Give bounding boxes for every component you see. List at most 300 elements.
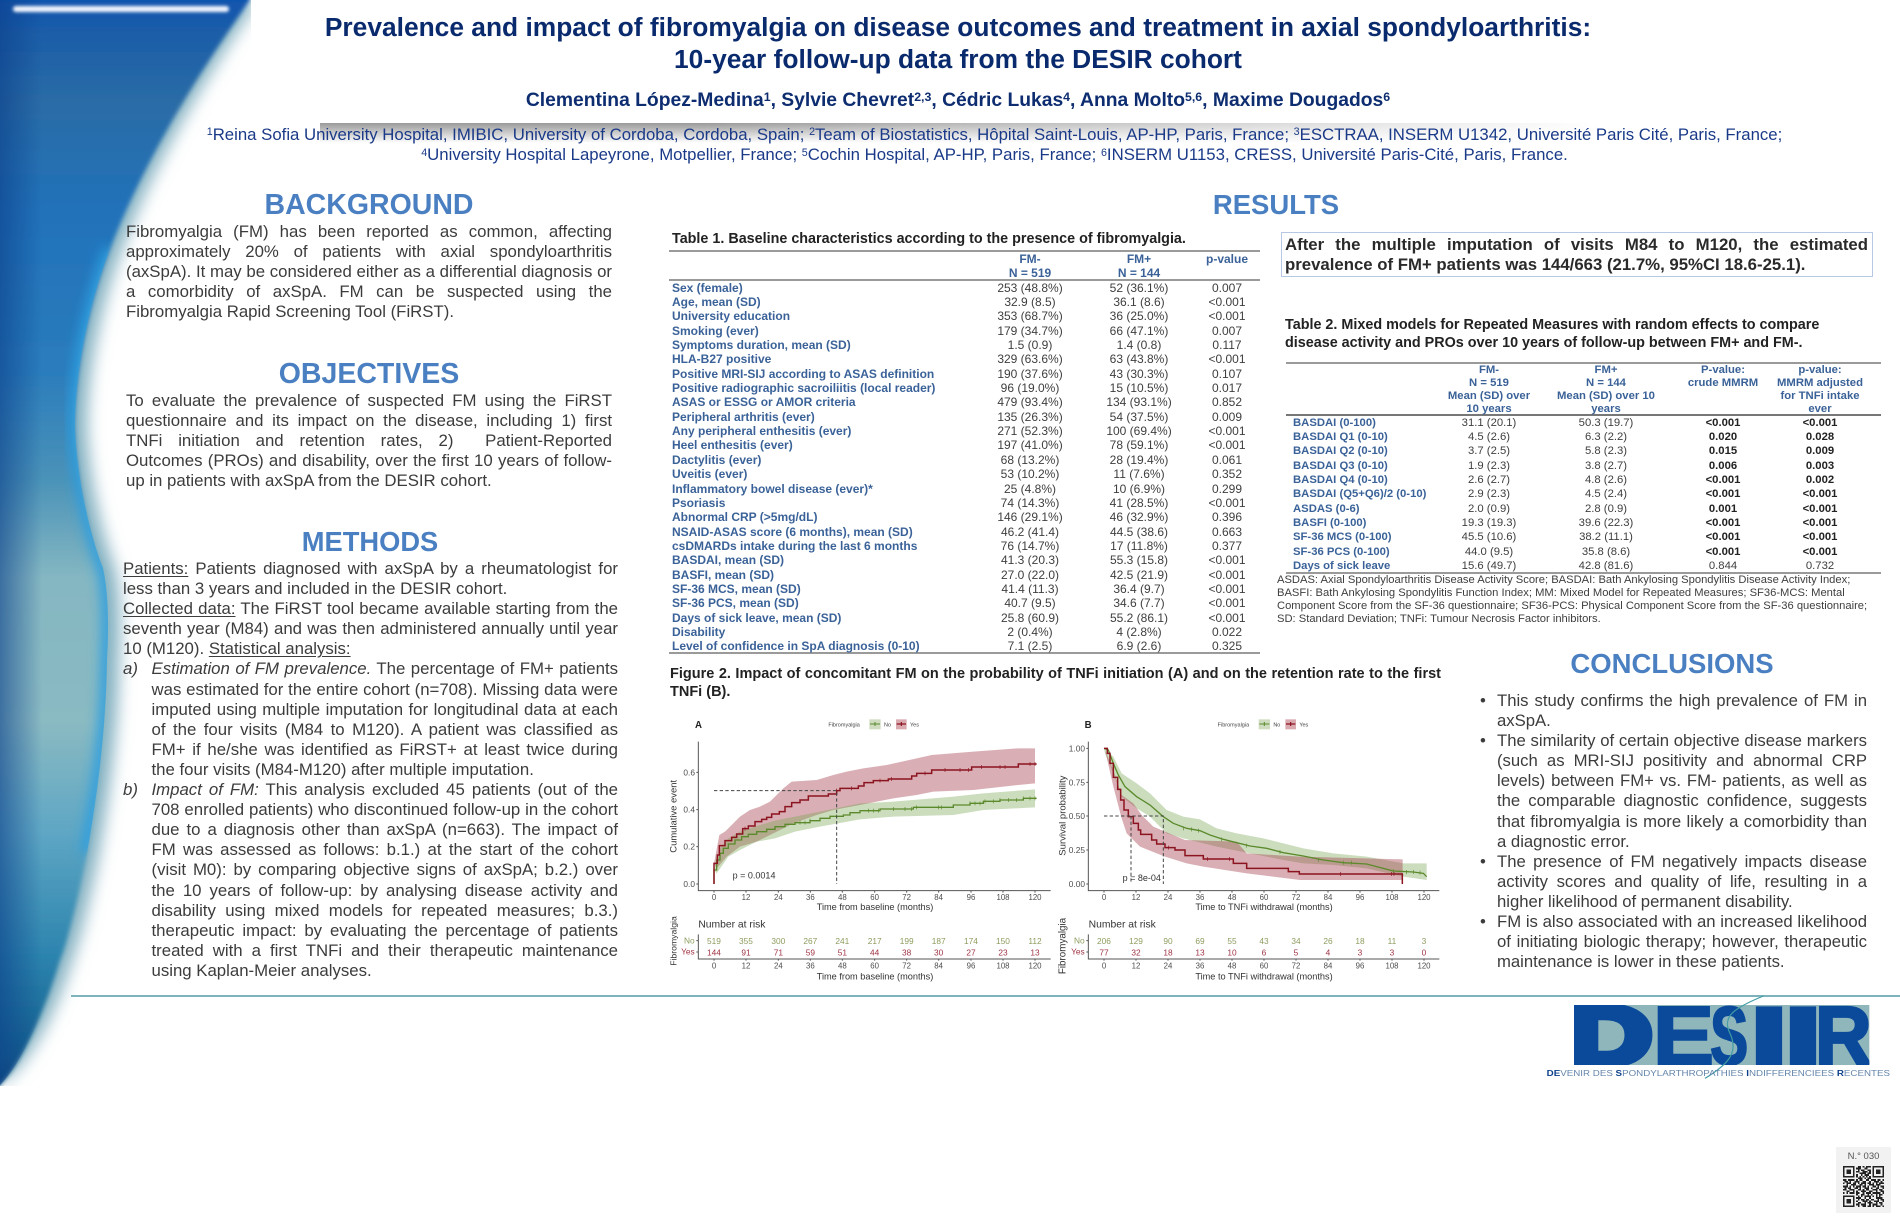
logo: DESIR: E <box>1653 990 1714 1082</box>
risk table: 55 <box>1227 936 1237 946</box>
logo: DESIR: S <box>1710 990 1748 1082</box>
y ticks <box>1069 743 1085 889</box>
table 1: 134 (93.1%) <box>1106 395 1172 409</box>
risk table: Yes <box>681 947 695 957</box>
risk table: 48 <box>1228 961 1237 970</box>
table 1: 0.299 <box>1212 482 1242 496</box>
table 1: 353 (68.7%) <box>997 309 1063 323</box>
x ticks: 72 <box>902 893 911 902</box>
table 1: 0.017 <box>1212 381 1242 395</box>
table 2: 0.009 <box>1806 445 1834 457</box>
risk table: 77 <box>1099 947 1109 957</box>
legend: No <box>884 722 891 728</box>
callout: prevalence: prevalence of FM+ patients was 144/663 (21.7%, 95%CI 18.6-25.1). <box>1285 255 1805 274</box>
table 1: 36 (25.0%) <box>1110 309 1168 323</box>
table 2: BASDAI (0-100) <box>1293 416 1376 428</box>
x ticks: 84 <box>934 893 944 902</box>
table 1: 0.007 <box>1212 324 1242 338</box>
risk table: 300 <box>771 936 786 946</box>
table 1: Sex (female) <box>672 280 743 294</box>
risk table: 44 <box>870 947 880 957</box>
heading: results: RESULTS <box>1213 188 1339 220</box>
table 1: HLA-B27 positive <box>672 352 771 366</box>
text: conclusions: activity scores and quality of life, resulting in a <box>1497 872 1867 891</box>
y label: Survival probability <box>1057 775 1068 856</box>
table 1: SF-36 MCS, mean (SD) <box>672 582 801 596</box>
table 2: FM+ <box>1595 364 1617 376</box>
table 1: 76 (14.7%) <box>1001 539 1059 553</box>
figure 2 title <box>670 666 1441 700</box>
list item b: b) <box>123 780 138 799</box>
list item b: Impact of FM: This analysis excluded 45 patients (out of the <box>152 780 618 799</box>
list item b: disability using mixed models for repeated measures; b.3.) <box>152 901 618 920</box>
grey band behind affiliations <box>320 123 1528 142</box>
text: conclusions: The similarity of certain objective disease markers <box>1497 731 1867 750</box>
table 1: 0.852 <box>1212 395 1242 409</box>
risk table: 13 <box>1030 947 1040 957</box>
risk table: 48 <box>838 961 847 970</box>
heading: conclusions: CONCLUSIONS <box>1570 648 1774 678</box>
text: background <box>126 222 612 321</box>
text: conclusions: higher likelihood of permanent disability. <box>1497 892 1793 911</box>
table 2: 4.5 (2.4) <box>1585 488 1627 500</box>
table 1: Heel enthesitis (ever) <box>672 438 793 452</box>
table 2: BASDAI Q1 (0-10) <box>1293 431 1388 443</box>
text: conclusions: This study confirms the high prevalence of FM in <box>1497 691 1867 710</box>
median lines <box>1104 816 1163 884</box>
table 1: 96 (19.0%) <box>1001 381 1059 395</box>
table 1: 7.1 (2.5) <box>1008 639 1052 653</box>
risk table: 90 <box>1163 936 1173 946</box>
list item a: a) <box>123 659 138 678</box>
text: objectives: up in patients with axSpA from the DESIR cohort. <box>126 471 492 490</box>
risk table: 36 <box>806 961 815 970</box>
x ticks: 24 <box>1164 893 1173 902</box>
table 1: 28 (19.4%) <box>1110 453 1168 467</box>
table 2: 44.0 (9.5) <box>1465 546 1513 558</box>
legend: Fibromyalgia <box>828 722 861 728</box>
table 1: SF-36 PCS, mean (SD) <box>672 596 799 610</box>
table 2: years <box>1591 403 1621 415</box>
curve: Yes <box>1104 748 1402 884</box>
table 1: <0.001 <box>1208 553 1246 567</box>
table 1: <0.001 <box>1208 568 1246 582</box>
list item b <box>123 780 618 980</box>
table 1: 253 (48.8%) <box>997 280 1063 294</box>
table 1: 32.9 (8.5) <box>1004 295 1056 309</box>
table 1: N = 144 <box>1118 266 1160 280</box>
risk table: 59 <box>806 947 815 957</box>
table 1: 27.0 (22.0) <box>1001 568 1059 582</box>
x ticks: 0 <box>712 893 717 902</box>
table 1: 271 (52.3%) <box>997 424 1063 438</box>
risk table: 241 <box>835 936 850 946</box>
risk table: 71 <box>774 947 783 957</box>
table 2: <0.001 <box>1706 488 1740 500</box>
risk table: 13 <box>1195 947 1205 957</box>
text: • <box>1480 912 1486 931</box>
list item a: imputed using multiple imputation for longitudinal data at each <box>152 700 618 719</box>
risk table: 0 <box>1422 947 1427 957</box>
table 2: SF-36 MCS (0-100) <box>1293 531 1392 543</box>
table 1: <0.001 <box>1208 309 1246 323</box>
table 2: 0.844 <box>1709 560 1737 572</box>
table 2: 0.001 <box>1709 503 1737 515</box>
legend <box>828 719 919 729</box>
list item b: FM was assessed as follows: b.1.) at the start of the cohort <box>152 840 618 859</box>
table 2: <0.001 <box>1803 531 1837 543</box>
p value: p = 8e-04 <box>1123 873 1161 883</box>
x ticks: 0 <box>1102 893 1107 902</box>
risk table: Time to TNFi withdrawal (months) <box>1195 971 1333 981</box>
text: conclusions: maintenance is lower in these patients. <box>1497 952 1785 971</box>
risk table: No <box>1074 935 1085 945</box>
risk table: 11 <box>1388 936 1397 946</box>
table 2: 35.8 (8.6) <box>1582 546 1630 558</box>
table 2: 45.5 (10.6) <box>1462 531 1516 543</box>
text: background: (axSpA). It may be considered either as a differential diagnosis or <box>126 262 612 281</box>
table 2: ever <box>1808 403 1832 415</box>
risk table: 43 <box>1259 936 1269 946</box>
risk table: 96 <box>1356 961 1365 970</box>
list item b: 708 enrolled patients) who discontinued follow-up in the cohort <box>152 800 618 819</box>
table 2: p-value: <box>1798 364 1842 376</box>
confidence bands <box>714 748 1035 873</box>
x ticks: 72 <box>1292 893 1300 902</box>
table 1: 52 (36.1%) <box>1110 280 1168 294</box>
logo: DESIR: R <box>1815 990 1872 1082</box>
panel letter B: B <box>1085 720 1092 731</box>
table 1: 34.6 (7.7) <box>1113 596 1165 610</box>
logo: DESIR: I <box>1747 990 1791 1082</box>
risk table: Yes <box>1071 947 1085 957</box>
text: methods: Patients: Patients diagnosed with axSpA by a rheumatologist for <box>123 559 618 578</box>
list item b: (visit M0): by comparing objective signs of axSpA; b.2.) over <box>152 860 618 879</box>
y ticks: 0.75 <box>1069 777 1085 787</box>
table 1: 15 (10.5%) <box>1110 381 1168 395</box>
panel letter A: A <box>695 720 702 731</box>
risk table: 3 <box>1358 947 1363 957</box>
text: objectives <box>126 391 612 490</box>
affiliations: 4University Hospital Lapeyrone, Motpellier, France; 5Cochin Hospital, AP-HP, Paris, France; 6INSERM U1153, CRESS, Université Paris-Cité, Paris, France. <box>421 145 1568 164</box>
table 2: 0.028 <box>1806 431 1834 443</box>
table 1: 11 (7.6%) <box>1113 467 1165 481</box>
table 1: <0.001 <box>1208 611 1246 625</box>
table 2: <0.001 <box>1706 517 1740 529</box>
table 1: FM+ <box>1127 252 1151 266</box>
heading: background: BACKGROUND <box>264 188 474 220</box>
x ticks: 36 <box>1196 893 1205 902</box>
text: methods: Collected data: The FiRST tool became available starting from the <box>123 599 618 618</box>
risk table: 112 <box>1028 936 1042 946</box>
table 1: 54 (37.5%) <box>1110 410 1168 424</box>
table 2: P-value: <box>1701 364 1745 376</box>
legend <box>1218 719 1309 729</box>
chart B: survival probability <box>1057 719 1440 982</box>
table 2: 10 years <box>1466 403 1512 415</box>
table 2: 5.8 (2.3) <box>1585 445 1627 457</box>
risk table <box>1057 917 1439 981</box>
text: conclusions: a diagnostic error. <box>1497 832 1630 851</box>
risk table: 6 <box>1262 947 1267 957</box>
table 1: 479 (93.4%) <box>997 395 1063 409</box>
legend: Yes <box>1299 722 1309 728</box>
y ticks: 0.25 <box>1069 845 1085 855</box>
x ticks: 36 <box>806 893 815 902</box>
x ticks: 48 <box>838 893 847 902</box>
table 1: 78 (59.1%) <box>1110 438 1168 452</box>
table 1: 41.3 (20.3) <box>1001 553 1059 567</box>
curve: No <box>1104 748 1427 877</box>
x ticks: 120 <box>1028 893 1042 902</box>
x label: Time to TNFi withdrawal (months) <box>1195 902 1333 912</box>
x ticks: 60 <box>1260 893 1269 902</box>
affiliations: 1Reina Sofia University Hospital, IMIBIC, University of Cordoba, Cordoba, Spain; 2Team of Biostatistics, Hôpital Saint-Louis, AP-HP, Paris, France; 3ESCTRAA, INSERM U1342, Université Paris Cité, Paris, France; <box>207 124 1782 144</box>
table 1: 40.7 (9.5) <box>1004 596 1056 610</box>
y label: Cumulative event <box>668 780 679 853</box>
risk table: 38 <box>902 947 912 957</box>
table 1: 66 (47.1%) <box>1110 324 1168 338</box>
curve: Yes <box>714 762 1037 884</box>
table 2: MMRM adjusted <box>1777 377 1863 389</box>
risk table: 10 <box>1227 947 1237 957</box>
risk table: 72 <box>1292 961 1300 970</box>
risk table: 120 <box>1028 961 1042 970</box>
table 1: 25 (4.8%) <box>1004 482 1056 496</box>
table 2: 0.015 <box>1709 445 1737 457</box>
QR badge: N.° 030 <box>1848 1151 1879 1162</box>
table 2: BASDAI Q2 (0-10) <box>1293 445 1388 457</box>
risk table: 32 <box>1131 947 1141 957</box>
text: conclusions: (such as MRI-SIJ positivity and abnormal CRP <box>1497 751 1867 770</box>
table 1: 55.3 (15.8) <box>1110 553 1168 567</box>
risk table: 18 <box>1355 936 1365 946</box>
text: objectives: To evaluate the prevalence of suspected FM using the FiRST <box>126 391 612 410</box>
table 2 footnote: SD: Standard Deviation; TNFi: Tumour Necrosis Factor inhibitors. <box>1277 612 1601 624</box>
table 2: 42.8 (81.6) <box>1579 560 1633 572</box>
table 1: 6.9 (2.6) <box>1117 639 1161 653</box>
table 2: 6.3 (2.2) <box>1585 431 1627 443</box>
risk table: 26 <box>1323 936 1333 946</box>
table 1: 190 (37.6%) <box>997 367 1063 381</box>
table 1: Age, mean (SD) <box>672 295 761 309</box>
table 1: 36.1 (8.6) <box>1113 295 1165 309</box>
risk table: 60 <box>1260 961 1269 970</box>
table 1: 36.4 (9.7) <box>1113 582 1165 596</box>
table 1: 0.352 <box>1212 467 1242 481</box>
table 1: 0.007 <box>1212 280 1242 294</box>
chart A: cumulative event <box>668 719 1051 982</box>
table 2: <0.001 <box>1706 474 1740 486</box>
text: conclusions: the comparable diagnostic confidence, suggests <box>1497 791 1867 810</box>
callout: prevalence: After the multiple imputation of visits M84 to M120, the estimated <box>1285 235 1868 254</box>
table 1: 53 (10.2%) <box>1001 467 1059 481</box>
table 1: <0.001 <box>1208 424 1246 438</box>
table 1: <0.001 <box>1208 596 1246 610</box>
table 1: BASFI, mean (SD) <box>672 568 774 582</box>
risk table: 36 <box>1196 961 1205 970</box>
x ticks: 12 <box>1132 893 1140 902</box>
risk table: 144 <box>707 947 721 957</box>
x ticks: 120 <box>1417 893 1431 902</box>
table 1: csDMARDs intake during the last 6 months <box>672 539 917 553</box>
table 1: 0.117 <box>1212 338 1242 352</box>
table 1 <box>669 250 1260 654</box>
risk table: Fibromyalgia <box>1057 917 1068 974</box>
risk table: Number at risk <box>698 920 766 931</box>
table 1: 0.022 <box>1212 625 1242 639</box>
table 1: 0.325 <box>1212 639 1242 653</box>
table 1: 4 (2.8%) <box>1116 625 1162 639</box>
table 2 footnote <box>1277 574 1867 624</box>
risk table: 206 <box>1097 936 1111 946</box>
list item a: of the four visits (M84 to M120). A patient was classified as <box>152 720 618 739</box>
table 1: Any peripheral enthesitis (ever) <box>672 424 851 438</box>
table 1: 179 (34.7%) <box>997 324 1063 338</box>
list item a: the four visits (M84-M120) after multiple imputation. <box>152 760 534 779</box>
risk table: 34 <box>1291 936 1301 946</box>
x ticks: 84 <box>1324 893 1333 902</box>
text: conclusions: FM is also associated with an increased likelihood <box>1497 912 1867 931</box>
table 1: <0.001 <box>1208 496 1246 510</box>
text: conclusions: levels) between FM+ vs. FM- patients, as well as <box>1497 771 1867 790</box>
text: background: Fibromyalgia Rapid Screening Tool (FiRST). <box>126 302 454 321</box>
table 1: 146 (29.1%) <box>997 510 1063 524</box>
table 2: <0.001 <box>1706 416 1740 428</box>
x ticks: 48 <box>1228 893 1237 902</box>
risk table: 72 <box>902 961 911 970</box>
table 1: 55.2 (86.1) <box>1110 611 1168 625</box>
risk table: 108 <box>1385 961 1399 970</box>
risk table: 150 <box>996 936 1010 946</box>
text: background: Fibromyalgia (FM) has been reported as common, affecting <box>126 222 612 240</box>
table 2: 0.002 <box>1806 474 1834 486</box>
table 1: <0.001 <box>1208 582 1246 596</box>
table 2 footnote: Component Score from the SF-36 questionnaire; SF36-PCS: Physical Component Score from the SF-36 questionnaire; <box>1277 600 1867 612</box>
table 2: 2.9 (2.3) <box>1468 488 1510 500</box>
table 1: 2 (0.4%) <box>1007 625 1053 639</box>
table 2: 38.2 (11.1) <box>1579 531 1633 543</box>
table 2: 0.003 <box>1806 460 1834 472</box>
table 2: FM- <box>1479 364 1499 376</box>
risk table: 0 <box>712 961 717 970</box>
x label: Time from baseline (months) <box>817 902 933 912</box>
risk table: 3 <box>1390 947 1395 957</box>
table 2: for TNFi intake <box>1780 390 1860 402</box>
table 2: BASDAI Q3 (0-10) <box>1293 460 1388 472</box>
table 1: Disability <box>672 625 725 639</box>
median lines <box>714 791 837 884</box>
list item a: FM+ if he/she was identified as FiRST+ at least twice during <box>152 740 618 759</box>
text: • <box>1480 691 1486 710</box>
table 2 title <box>1285 316 1819 350</box>
authors: Clementina López-Medina1, Sylvie Chevret2,3, Cédric Lukas4, Anna Molto5,6, Maxime Dougados6 <box>526 90 1390 111</box>
table 1: 68 (13.2%) <box>1001 453 1059 467</box>
table 2: N = 519 <box>1469 377 1509 389</box>
x ticks <box>1102 893 1431 902</box>
icon: QR code <box>1843 1166 1884 1207</box>
table 1: University education <box>672 309 790 323</box>
risk table: 96 <box>967 961 976 970</box>
risk table: 60 <box>870 961 880 970</box>
table 1: 25.8 (60.9) <box>1001 611 1059 625</box>
list item b: the 10 years of follow-up: by analysing disease activity and <box>152 880 618 900</box>
title: 10-year follow-up data from the DESIR cohort <box>674 44 1242 74</box>
risk table: 24 <box>1164 961 1173 970</box>
text: methods <box>123 559 618 980</box>
text: background: a comorbidity of axSpA. FM can be suspected using the <box>126 282 612 301</box>
table 1: 74 (14.3%) <box>1001 496 1059 510</box>
table 1: <0.001 <box>1208 438 1246 452</box>
table 2 footnote: ASDAS: Axial Spondyloarthritis Disease Activity Score; BASDAI: Bath Ankylosing Spondylitis Disease Activity Index; <box>1277 574 1850 586</box>
table 2: BASFI (0-100) <box>1293 517 1366 529</box>
table 2: Days of sick leave <box>1293 560 1390 572</box>
table 1: 42.5 (21.9) <box>1110 568 1168 582</box>
table 2: <0.001 <box>1706 546 1740 558</box>
table 1: 0.061 <box>1212 453 1242 467</box>
callout: prevalence <box>1281 232 1873 277</box>
y ticks: 0.50 <box>1069 811 1085 821</box>
table 1: ASAS or ESSG or AMOR criteria <box>672 395 856 409</box>
risk table: 27 <box>966 947 976 957</box>
y ticks: 0.4 <box>683 805 695 815</box>
risk table: 108 <box>996 961 1010 970</box>
table 1: Uveitis (ever) <box>672 467 747 481</box>
list item b: therapeutic impact: by evaluating the percentage of patients <box>152 921 618 940</box>
text: conclusions: that fibromyalgia is more likely a comorbidity than <box>1497 812 1867 831</box>
x ticks: 108 <box>1385 893 1399 902</box>
table 1: 10 (6.9%) <box>1113 482 1165 496</box>
risk table: 84 <box>1324 961 1333 970</box>
table 2: 2.0 (0.9) <box>1468 503 1510 515</box>
table 1: 41 (28.5%) <box>1110 496 1168 510</box>
table 2: BASDAI (Q5+Q6)/2 (0-10) <box>1293 488 1426 500</box>
table 2: 50.3 (19.7) <box>1579 416 1633 428</box>
table 1: Psoriasis <box>672 496 725 510</box>
x ticks <box>712 893 1042 902</box>
y ticks <box>683 767 695 889</box>
text: conclusions: axSpA. <box>1497 711 1551 730</box>
table 2: 3.7 (2.5) <box>1468 445 1510 457</box>
logo: DESIR <box>1547 996 1891 1079</box>
QR badge <box>1836 1147 1891 1213</box>
legend: Yes <box>910 722 919 728</box>
legend: No <box>1273 722 1280 728</box>
risk table: 4 <box>1326 947 1331 957</box>
text: methods: less than 3 years and included in the DESIR cohort. <box>123 579 507 598</box>
table 2: <0.001 <box>1803 517 1837 529</box>
y ticks: 0.6 <box>683 767 695 777</box>
axes <box>1086 742 1439 893</box>
risk table: 51 <box>838 947 847 957</box>
table 1: <0.001 <box>1208 295 1246 309</box>
table 1: 44.5 (38.6) <box>1110 525 1168 539</box>
x ticks: 60 <box>870 893 880 902</box>
p value: p = 0.0014 <box>733 870 775 880</box>
table 1: 17 (11.8%) <box>1110 539 1168 553</box>
table 1: 0.663 <box>1212 525 1242 539</box>
table 1: Abnormal CRP (>5mg/dL) <box>672 510 817 524</box>
risk table: 174 <box>964 936 978 946</box>
risk table: 30 <box>934 947 944 957</box>
risk table: 23 <box>998 947 1008 957</box>
title <box>325 12 1591 74</box>
table 1: Days of sick leave, mean (SD) <box>672 611 841 625</box>
confidence bands <box>1104 748 1427 880</box>
table 2: 3.8 (2.7) <box>1585 460 1627 472</box>
risk table: 519 <box>707 936 721 946</box>
table 2 title: disease activity and PROs over 10 years of follow-up between FM+ and FM-. <box>1285 334 1802 350</box>
